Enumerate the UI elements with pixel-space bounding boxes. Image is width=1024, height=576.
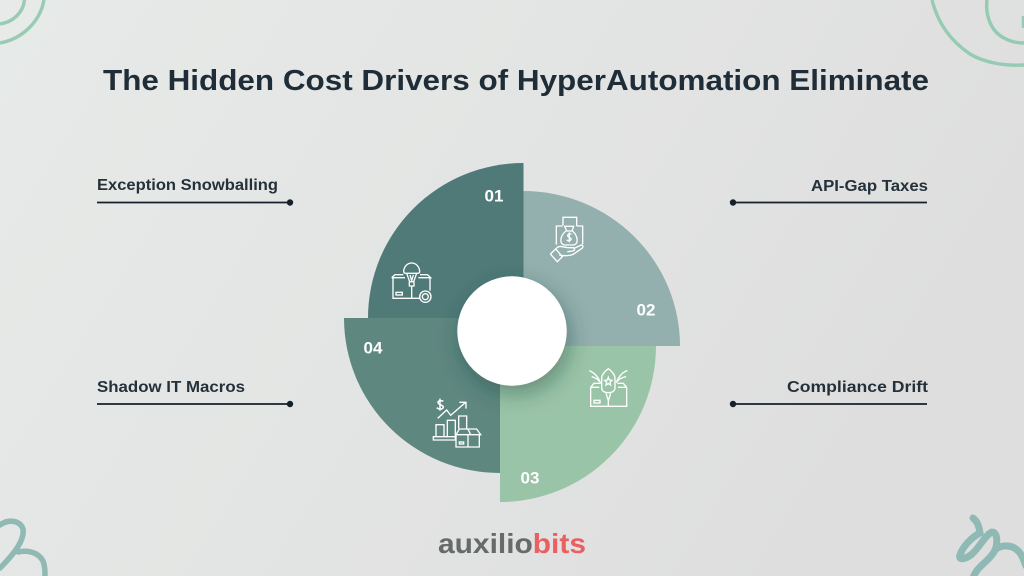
decoration: top-left arcs bbox=[0, 0, 44, 43]
decoration: bottom-right squiggle bbox=[960, 518, 1024, 576]
icon: box with bulb and gear bbox=[392, 263, 431, 302]
segment 04 bbox=[344, 318, 500, 473]
title: The Hidden Cost Drivers of HyperAutomation Eliminate bbox=[103, 65, 929, 97]
label: Compliance Drift bbox=[730, 379, 928, 407]
icon: hand holding money bag bbox=[550, 217, 583, 262]
segment 01 bbox=[368, 163, 524, 318]
icon: growth chart with boxes bbox=[433, 399, 481, 447]
number 01: 01 bbox=[485, 186, 503, 206]
number 04: 04 bbox=[364, 338, 383, 358]
label: Shadow IT Macros bbox=[97, 379, 293, 407]
label: API-Gap Taxes: API-Gap Taxes bbox=[811, 178, 928, 195]
decoration: top-right arcs bbox=[932, 0, 1024, 65]
icon: rocket launching from box bbox=[589, 369, 627, 406]
label: Shadow IT Macros: Shadow IT Macros bbox=[97, 379, 245, 396]
logo: auxiliobits: auxilio bits bbox=[438, 528, 586, 559]
center circle bbox=[457, 276, 567, 386]
label: Exception Snowballing: Exception Snowballing bbox=[97, 177, 278, 194]
label: Compliance Drift: Compliance Drift bbox=[787, 379, 928, 396]
label: API-Gap Taxes bbox=[730, 178, 928, 206]
number 02: 02 bbox=[637, 300, 655, 320]
segment 03 bbox=[500, 346, 656, 502]
label: Exception Snowballing bbox=[97, 177, 293, 206]
number 03: 03 bbox=[521, 468, 539, 488]
decoration: bottom-left squiggle bbox=[0, 521, 45, 576]
segment 02 bbox=[523, 191, 680, 346]
